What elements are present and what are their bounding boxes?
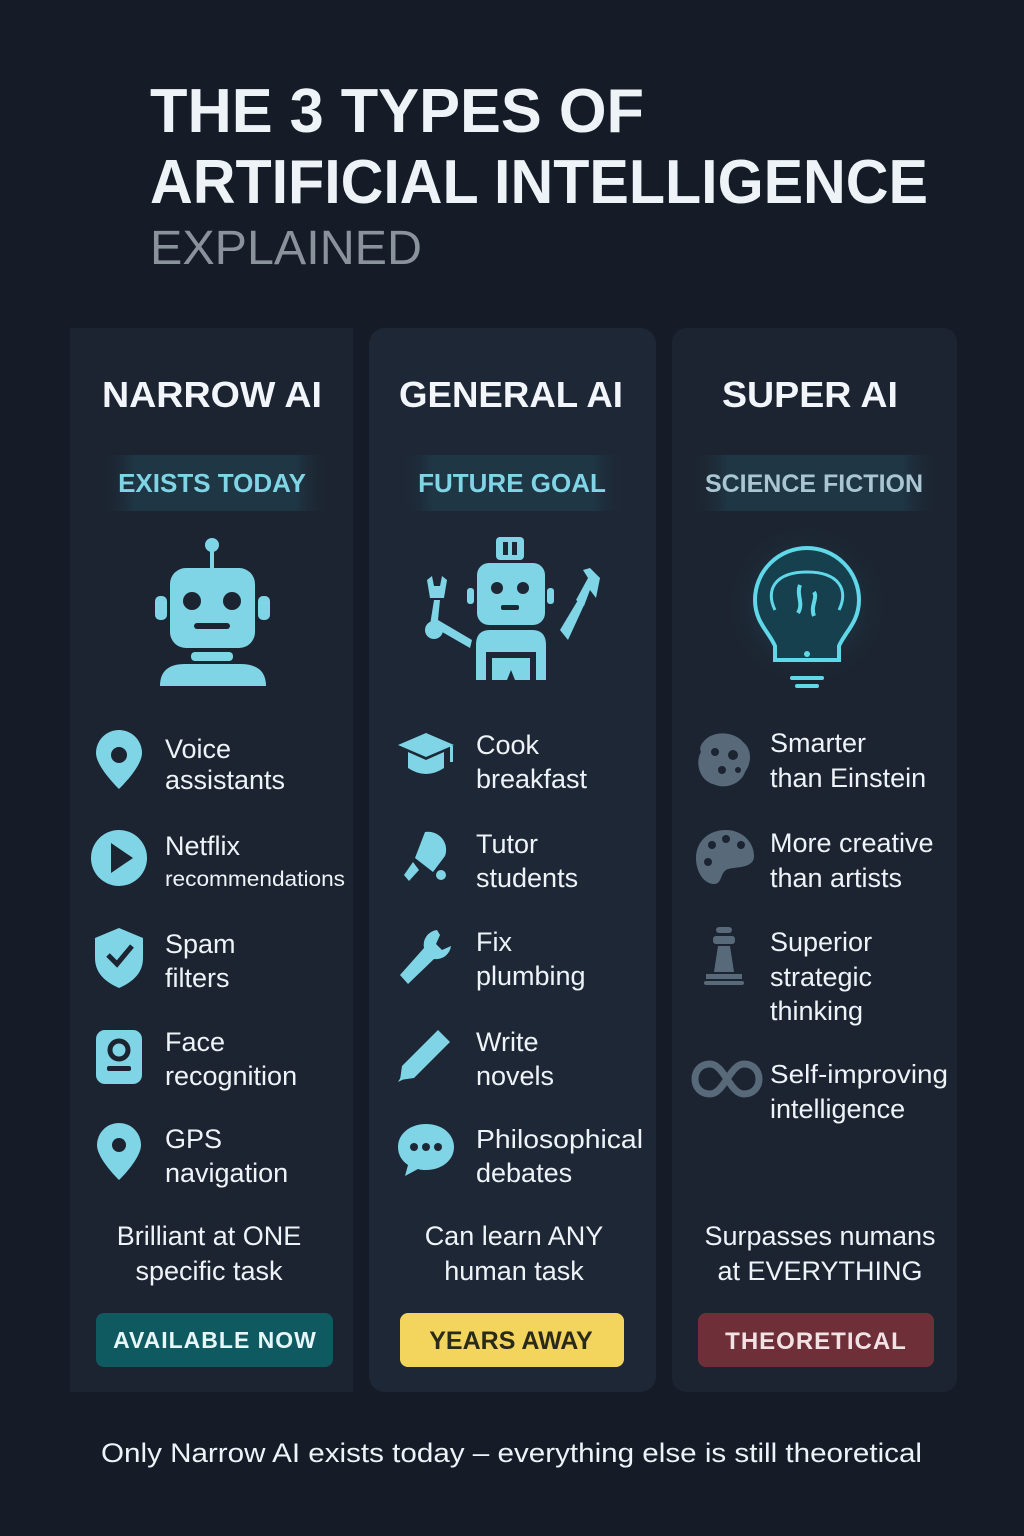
button: years away: [400, 1313, 624, 1367]
button: years away: YEARS AWAY: [429, 1327, 593, 1355]
panel: general AI: [369, 328, 656, 1392]
list: super examples: [695, 728, 948, 1124]
list: general examples: Fix: [476, 927, 512, 957]
icon: robot with wrenches: [425, 537, 600, 680]
panel: super AI: [672, 328, 957, 1392]
title: ARTIFICIAL INTELLIGENCE: [150, 148, 928, 217]
panel: narrow AI: [70, 328, 353, 1392]
button: available now: AVAILABLE NOW: [113, 1327, 317, 1353]
footer note: Only Narrow AI exists today – everything else is still theoretical: [101, 1438, 922, 1468]
list: general examples: Write: [476, 1027, 539, 1057]
list: narrow examples: recommendations: [165, 868, 345, 891]
list: narrow examples: Spam: [165, 929, 236, 959]
list: narrow examples: Netflix: [165, 831, 241, 861]
list: general examples: debates: [476, 1158, 572, 1188]
list: narrow examples: GPS: [165, 1124, 222, 1154]
icon: glowing lightbulb: [722, 520, 892, 690]
button: theoretical: [698, 1313, 934, 1367]
list: narrow examples: Face: [165, 1027, 225, 1057]
badge: science fiction: [690, 455, 940, 511]
list: general examples: novels: [476, 1061, 554, 1091]
summary: narrow: Brilliant at ONE: [117, 1221, 301, 1251]
badge: exists today: EXISTS TODAY: [118, 468, 306, 498]
summary: super: Surpasses numans: [704, 1221, 936, 1251]
list: narrow examples: [91, 730, 345, 1188]
list: narrow examples: filters: [165, 963, 230, 993]
list: super examples: Smarter: [770, 728, 866, 758]
summary: general: Can learn ANY: [425, 1221, 603, 1251]
list: super examples: thinking: [770, 996, 863, 1026]
list: super examples: than artists: [770, 863, 902, 893]
list: general examples: plumbing: [476, 961, 586, 991]
list: narrow examples: Voice: [165, 734, 231, 764]
list: narrow examples: navigation: [165, 1158, 288, 1188]
icon: robot: [155, 538, 270, 686]
icon: infinity: [695, 1064, 759, 1094]
summary: super: at EVERYTHING: [717, 1256, 923, 1286]
summary: narrow: specific task: [135, 1256, 283, 1286]
button: available now: [96, 1313, 333, 1367]
list: super examples: More creative: [770, 828, 934, 858]
list: general examples: Cook: [476, 730, 540, 760]
title: EXPLAINED: [150, 222, 422, 275]
badge: future goal: FUTURE GOAL: [418, 468, 606, 498]
summary: super: [704, 1221, 936, 1286]
list: narrow examples: recognition: [165, 1061, 297, 1091]
list: general examples: breakfast: [476, 764, 588, 794]
heading: general AI: GENERAL AI: [399, 374, 623, 415]
badge: future goal: [398, 455, 628, 511]
list: general examples: Philosophical: [476, 1124, 643, 1154]
list: super examples: strategic: [770, 962, 872, 992]
badge: science fiction: SCIENCE FICTION: [705, 470, 923, 498]
summary: narrow: [117, 1221, 301, 1286]
list: super examples: than Einstein: [770, 763, 926, 793]
list: general examples: students: [476, 863, 578, 893]
summary: general: [425, 1221, 603, 1286]
list: super examples: Superior: [770, 927, 872, 957]
badge: exists today: [100, 455, 330, 511]
list: narrow examples: assistants: [165, 765, 285, 795]
button: theoretical: THEORETICAL: [725, 1328, 907, 1355]
title: [150, 77, 928, 275]
list: super examples: intelligence: [770, 1094, 905, 1124]
heading: narrow AI: NARROW AI: [102, 374, 322, 415]
list: general examples: Tutor: [476, 829, 538, 859]
list: super examples: Self-improving: [770, 1059, 948, 1089]
list: general examples: [398, 730, 643, 1188]
summary: general: human task: [444, 1256, 584, 1286]
title: THE 3 TYPES OF: [150, 77, 644, 146]
heading: super AI: SUPER AI: [722, 374, 898, 415]
